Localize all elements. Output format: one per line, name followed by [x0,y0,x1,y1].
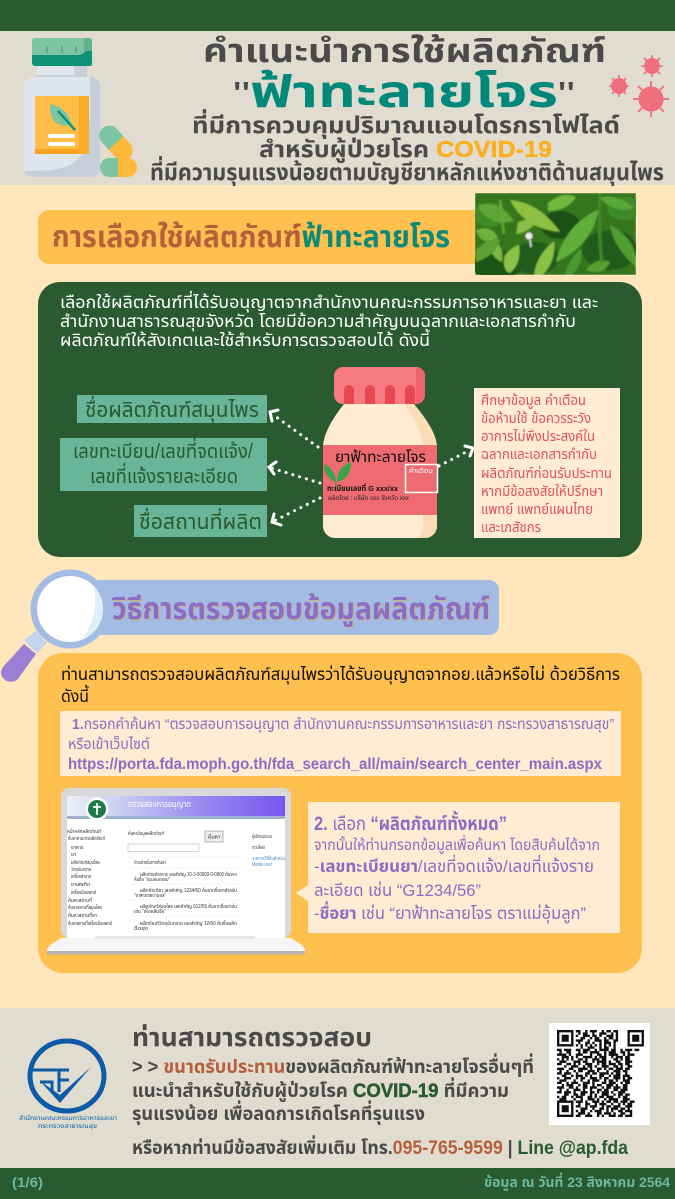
step 1 box: 1.กรอกคำค้นหา “ตรวจสอบการอนุญาต สำนักงานคณะกรรมการอาหารและยา กระทรวงสาธารณสุข” [72,716,614,733]
heading pill: choosing product [38,210,488,264]
illustration: laptop with search page: "ยาพาราเซตามอล" [134,893,166,899]
label: manufacturer [134,505,267,537]
illustration: laptop with search page [47,788,305,954]
step 1 box [60,711,621,776]
icon: capsules [95,121,137,177]
intro text: ท่านสามารถตรวจสอบผลิตภัณฑ์สมุนไพรว่าได้รับอนุญาตจากอย.แล้วหรือไม่ ด้วยวิธีการ [61,664,620,685]
illustration: laptop with search page: ผลิตภัณฑ์ยา เลขสำคัญ 1234/60 ค้นจากชื่อยาสำหรับ [140,886,237,894]
heading pill: choosing product: การเลือกใช้ผลิตภัณฑ์ฟ้าทะลายโจร [52,221,450,254]
label: registration number: เลขที่แจ้งรายละเอียด [90,462,238,488]
illustration: product bottle: ผลิตโดย : บริษัท xxx จังหวัด xxx [328,494,410,502]
arrow: to registration number [269,462,320,483]
label: registration number: เลขทะเบียน/เลขที่จดแจ้ง/ [73,437,253,463]
callout: warning advice: แพทย์ แพทย์แผนไทย [481,501,593,517]
illustration: laptop with search page: ฉีดยุง [134,925,148,932]
footer text: > > ขนาดรับประทานของผลิตภัณฑ์ฟ้าทะลายโจรอื่นๆที่ [132,1053,534,1078]
footer text: รุนแรงน้อย เพื่อลดการเกิดโรคที่รุนแรง [132,1100,425,1125]
illustration: laptop with search page: ผลิตภัณฑ์สมุนไพร [71,859,100,866]
illustration: laptop with search page: วัตถุอันตราย [71,866,91,873]
bottom bar [0,1168,675,1199]
illustration: product bottle: ทะเบียนเลขที่ G xxx/xx [327,483,399,493]
illustration: laptop with search page: ยา [71,852,76,858]
step 2 callout: -ชื่อยา เช่น “ยาฟ้าทะลายโจร ตราแม่อุ้มลูก” [314,901,586,925]
QR code [549,1023,650,1125]
illustration: laptop with search page: ค้นหาสถานที่ยา [68,911,97,919]
intro text: ผลิตภัณฑ์ให้สังเกตและใช้สำหรับการตรวจสอบได้ ดังนี้ [60,328,430,350]
heading pill: how to verify [90,580,499,635]
header band [0,31,675,186]
intro text [61,664,620,706]
step 1 box: https://porta.fda.moph.go.th/fda_search_all/main/search_center_main.aspx [68,756,602,773]
illustration: product bottle [323,367,438,538]
warning sticker: คำเตือน [409,467,433,475]
illustration: laptop with search page: ค้นหาสถานที่เครื่องมือแพทย์ [68,919,112,927]
label: product name: ชื่อผลิตภัณฑ์สมุนไพร [85,395,259,423]
footer text: แนะนำสำหรับใช้กับผู้ป่วยโรค COVID-19 ที่มีความ [132,1077,509,1102]
heading pill: how to verify: วิธีการตรวจสอบข้อมูลผลิตภัณฑ์ [111,593,490,627]
icon: viruses [609,55,669,117]
illustration: laptop with search page: ค้นหา [208,834,220,840]
top bar [0,0,675,31]
title line 4: สำหรับผู้ป่วยโรค COVID-19 [259,136,552,163]
callout: warning advice: ข้อห้ามใช้ ข้อควรระวัง [481,410,591,426]
footer text [132,1053,534,1125]
icon: medicine bottle [24,38,100,177]
callout: warning advice: ฉลากและเอกสารกำกับ [481,446,597,462]
illustration: laptop with search page: เช่น "เห็ดหลินจือ" [134,908,166,915]
intro text: เลือกใช้ผลิตภัณฑ์ที่ได้รับอนุญาตจากสำนักงานคณะกรรมการอาหารและยา และ [60,290,598,313]
illustration: laptop with search page: ตัวอย่างในการค้นหา [134,859,166,866]
panel: how to verify [38,653,642,973]
illustration: laptop with search page: ผู้เข้าชมระบบ [252,833,272,840]
warning sticker [406,464,438,492]
footer heading: ท่านสามารถตรวจสอบ [132,1022,372,1052]
page number: (1/6) [12,1174,43,1190]
intro text: ดังนี้ [61,684,89,706]
illustration: laptop with search page: รายการวิธีค้นสำหรับ [252,855,285,862]
logo: FDA Thailand [19,1041,117,1131]
illustration: laptop with search page: ผลิตภัณฑ์สมุนไพร เลขสำคัญ 612/59 ค้นจากชื่อยาเช่น [140,902,237,910]
step 2 callout: ละเอียด เช่น “G1234/56” [314,881,481,900]
callout: warning advice: อาการไม่พึงประสงค์ใน [481,428,595,444]
label: manufacturer: ชื่อสถานที่ผลิต [139,507,262,534]
contact line: หรือหากท่านมีข้อสงสัยเพิ่มเติม โทร.095-765-9599 | Line @ap.fda [132,1135,628,1159]
illustration: laptop with search page: ตรวจสอบการอนุญาต [128,799,191,809]
illustration: laptop with search page: Mobile user [252,862,272,868]
panel: choosing product [38,282,642,557]
arrow: to warning box [439,446,473,466]
illustration: laptop with search page: เครื่องสำอาง [71,872,91,880]
callout: warning advice [474,388,620,538]
data date: ข้อมูล ณ วันที่ 23 สิงหาคม 2564 [484,1172,670,1192]
icon: sprout [324,462,351,490]
intro text [60,290,598,350]
photo: herb leaves [475,193,636,275]
arrow: to manufacturer [272,498,320,525]
illustration: laptop with search page: เครื่องมือแพทย์ [71,888,96,896]
title line 1: คำแนะนำการใช้ผลิตภัณฑ์ [203,32,606,69]
heading pill: how to verify: วิธีการตรวจสอบข้อมูลผลิตภัณฑ์ [112,594,491,628]
step 1 box: หรือเข้าเว็บไซต์ [68,735,150,753]
icon: magnifying glass [1,570,110,682]
logo: FDA Thailand: สำนักงานคณะกรรมการอาหารและยา [19,1114,117,1122]
illustration: laptop with search page: ค้นหาตามการผลิตภัณฑ์ [68,835,105,842]
footer band [0,1008,675,1168]
illustration: laptop with search page: ยาเสพติด [71,882,90,888]
illustration: laptop with search page: ค้นหาสถานที่ [68,896,92,904]
callout: warning advice: ศึกษาข้อมูล คำเตือน [481,392,586,409]
step 2 callout: จากนั้นให้ท่านกรอกข้อมูลเพื่อค้นหา โดยสืบค้นได้จาก [314,834,600,854]
illustration: laptop with search page: ค้นหาสถานที่สมุนไพร [68,903,102,911]
label: registration number [60,437,267,491]
illustration: laptop with search page: ค้นชื่อ "ขนมอบกรอบ" [134,875,170,883]
illustration: laptop with search page: อาหาร [71,845,84,851]
callout: warning advice: และเภสัชกร [481,519,541,535]
illustration: laptop with search page: หน้าหลักผลิตภัณฑ์ [67,828,101,835]
title line 2: herb name: "ฟ้าทะลายโจร " [233,68,575,117]
illustration: laptop with search page: ดาวน์โหลด [252,845,265,851]
illustration: laptop with search page: ค้นหาข้อมูลผลิตภัณฑ์ [128,830,164,837]
step 2 callout: 2. เลือก “ผลิตภัณฑ์ทั้งหมด” [314,811,507,835]
logo: FDA Thailand: กระทรวงสาธารณสุข [38,1123,97,1131]
callout: warning advice: หากมีข้อสงสัยให้ปรึกษา [481,483,603,499]
illustration: product bottle: ยาฟ้าทะลายโจร [335,449,426,466]
title line 3: ที่มีการควบคุมปริมาณแอนโดรกราโฟไลด์ [192,109,620,139]
illustration: laptop with search page: ผลิตภัณฑ์อาหาร เลขสำคัญ 10-3-00000-0-0000 ค้นจาก [140,871,237,878]
step 2 callout: -เลขทะเบียนยา/เลขที่จดแจ้ง/เลขที่แจ้งราย [314,854,594,876]
illustration: laptop with search page: ผลิตภัณฑ์วัตถุอันตราย เลขสำคัญ 12/60 ค้นชื่อผลิต [140,919,237,927]
callout: warning advice: ผลิตภัณฑ์ก่อนรับประทาน [481,465,612,481]
arrow: to product name [270,410,318,447]
intro text: สำนักงานสาธารณสุขจังหวัด โดยมีข้อความสำคัญบนฉลากและเอกสารกำกับ [60,311,576,332]
step 2 callout [296,802,620,933]
